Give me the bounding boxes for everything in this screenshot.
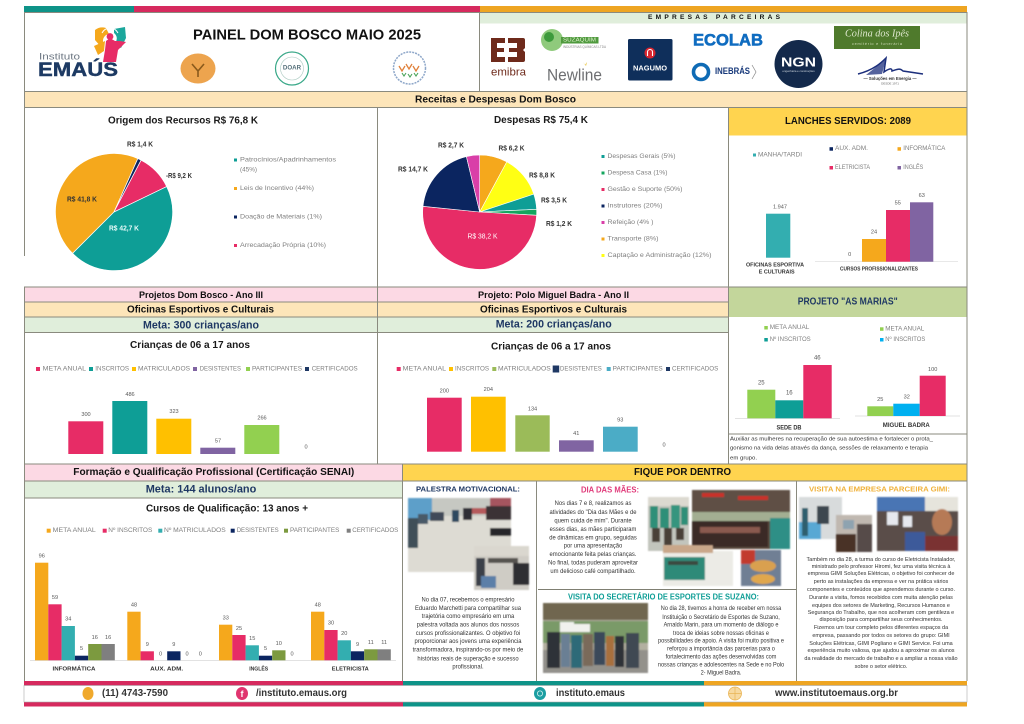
title: PAINEL DOM BOSCO MAIO 2025 — [193, 26, 421, 44]
text: as marias description: gonismo na vida delas através da dança, sessões de relaxamento e terapia — [730, 446, 929, 452]
bar chart: 200 — [440, 388, 449, 394]
header: institute logo and title — [38, 26, 426, 85]
legend: despesas: Captação e Administração (12%) — [608, 252, 712, 259]
photo: palestra audience — [474, 546, 529, 590]
contact: facebook: /instituto.emaus.org — [256, 688, 347, 699]
legend: despesas — [602, 153, 712, 259]
pie labels: R$ 42,7 K — [109, 226, 139, 232]
text: por uma apresentação — [564, 542, 623, 550]
bar chart: Miguel Badra: MIGUEL BADRA — [883, 422, 930, 429]
photo: grupo com certificados — [877, 497, 958, 551]
legend: despesas: Gestão e Suporte (50%) — [608, 186, 682, 193]
text: transformadora, inspirando-os por meio de — [413, 646, 524, 654]
legend: CERTIFICADOS — [312, 366, 358, 372]
bar chart: oficinas: OFICINAS ESPORTIVA — [746, 262, 804, 268]
text: proporcionar aos jovens uma experiência — [414, 638, 522, 645]
photo: palestra room — [408, 498, 511, 572]
logo: Gimi: — Soluções em Energia — — [863, 76, 917, 81]
group: inglês: 15 — [249, 636, 255, 642]
legend — [36, 366, 358, 372]
contact: phone — [82, 687, 168, 700]
pie labels: R$ 41,8 K — [67, 196, 97, 204]
pie labels: R$ 1,2 K — [546, 221, 572, 228]
logo: Ecolab: ECOLAB — [693, 30, 763, 50]
legend: Miguel Badra: META ANUAL — [885, 326, 925, 332]
logo: Newline: Newline — [547, 66, 602, 84]
text: experiência muito valiosa, que ajudou a aproximar os alunos — [807, 648, 955, 654]
contact: instagram: instituto.emaus — [556, 688, 625, 699]
group: eletricista: ELETRICISTA — [332, 666, 369, 672]
heading: DIA DAS MÃES: — [581, 486, 639, 494]
contact: facebook — [236, 687, 347, 700]
legend: lanches: AUX. ADM. — [835, 145, 868, 152]
group: inglês: 33 — [223, 616, 229, 622]
band: oficinas — [377, 302, 728, 317]
legend: PARTICIPANTES — [613, 366, 663, 372]
logo: Gimi — [858, 58, 923, 86]
text: as marias description: Auxiliar as mulheres na recuperação de sua autoestima e fortalecer o prota_ — [730, 436, 934, 442]
bar chart: 486 — [125, 392, 135, 398]
top colour bar — [24, 6, 967, 12]
legend: despesas: Despesa Casa (1%) — [608, 170, 668, 176]
logo: NGN — [774, 40, 822, 88]
band: oficinas: Oficinas Esportivos e Culturais — [127, 304, 274, 316]
chart title: Despesas R$ 75,4 K — [494, 114, 588, 126]
band: Receitas e Despesas — [24, 92, 967, 108]
chart title: Crianças de 06 a 17 anos — [491, 341, 611, 353]
bar chart: oficinas — [746, 204, 804, 276]
text: componentes e conteúdos que aprendemos durante o curso. — [807, 587, 955, 593]
group: eletricista: 11 — [368, 640, 374, 646]
group: inglês: 25 — [236, 626, 242, 632]
logo: NGN: engenharia e construções — [782, 69, 815, 73]
text: ministrado pelo professor Hiromi, fez uma visita técnica à — [812, 564, 951, 570]
text: esses dias, as mães participaram — [550, 526, 636, 533]
bar chart: 323 — [169, 409, 179, 415]
logo: Inebras: INEBRÁS — [715, 66, 750, 77]
logo: NGN: NGN — [781, 54, 816, 70]
logo: emibra: emibra — [491, 66, 527, 78]
text: emocionante feita pelas crianças. — [550, 551, 637, 558]
text: as marias description: em grupo. — [730, 455, 757, 461]
legend: Miguel Badra — [880, 326, 925, 343]
legend: PARTICIPANTES — [252, 366, 302, 372]
legend: origem: Leis de Incentivo (44%) — [240, 185, 314, 192]
logo: Suzaquim: INDÚSTRIAS QUÍMICAS LTDA — [563, 45, 607, 49]
bar chart: sede: 16 — [786, 391, 793, 397]
legend: DESISTENTES — [200, 366, 241, 372]
text — [658, 606, 784, 677]
text: disposição para compartilhar seus conhecimentos. — [819, 617, 943, 623]
news: visita do secretário — [543, 592, 784, 677]
text: da realidade do mercado de trabalho e a ampliar a nossa visão — [804, 656, 958, 662]
group: inglês: 0 — [290, 652, 294, 658]
band: meta: Meta: 200 crianças/ano — [496, 318, 612, 330]
bar chart: Miguel Badra: 25 — [877, 397, 883, 403]
group: eletricista: 11 — [381, 640, 387, 646]
text: No dia 28, tivemos a honra de receber em nossa — [661, 606, 782, 612]
legend: origem: Arrecadação Própria (10%) — [240, 242, 326, 249]
text: profissional. — [452, 663, 484, 671]
logo: Gimi: DESDE 1971 — [881, 82, 899, 86]
band: Empresas parceiras: EMPRESAS PARCEIRAS — [648, 14, 781, 21]
legend: META ANUAL — [53, 527, 96, 534]
contact: facebook: f — [240, 689, 244, 699]
legend: origem: (45%) — [240, 166, 257, 174]
text: de dinâmicas em grupo, seguidas — [549, 534, 637, 541]
text: palestra voltada aos alunos dos nossos — [417, 621, 519, 629]
group: eletricista: 48 — [315, 602, 321, 608]
divider — [538, 588, 796, 590]
pie labels: R$ 1,4 K — [127, 142, 153, 148]
text: Também no dia 28, a turma do curso de Eletricista Instalador, — [807, 557, 956, 563]
legend: META ANUAL — [43, 366, 86, 372]
text: Eduardo Marchetti para compartilhar sua — [415, 605, 522, 612]
photo: bolos — [741, 550, 781, 586]
bar chart: 93 — [617, 417, 623, 423]
group: aux. adm.: 0 — [159, 652, 162, 658]
bar chart: oficinas: E CULTURAIS — [759, 270, 795, 276]
legend: MATRICULADOS — [498, 366, 551, 372]
text — [548, 500, 638, 575]
legend: sede: Nº INSCRITOS — [770, 336, 811, 343]
text: No final, todas puderam aproveitar — [548, 559, 638, 566]
group: informática: 34 — [65, 616, 71, 622]
pie labels — [398, 142, 572, 240]
text: empresa, passando por todos os setores do grupo: GIMI — [812, 633, 950, 639]
photo: visita 1 — [799, 497, 842, 539]
footer — [24, 681, 967, 706]
bar chart: cursos profissionalizantes: 55 — [895, 201, 901, 207]
text: Durante a visita, fomos recebidos com muita atenção pelas — [809, 595, 953, 601]
bar chart: sede: SEDE DB — [776, 424, 802, 432]
group: eletricista: 20 — [341, 631, 347, 637]
band: meta: Meta: 300 crianças/ano — [143, 320, 259, 332]
legend: despesas: Despesas Gerais (5%) — [608, 153, 676, 160]
band: fique por dentro: FIQUE POR DENTRO — [634, 466, 731, 478]
group: inglês — [219, 616, 294, 672]
band: formação heading — [24, 464, 402, 481]
pie labels: R$ 38,2 K — [468, 234, 498, 240]
legend: INSCRITOS — [95, 366, 129, 372]
panel: despesas — [398, 114, 712, 269]
text: Soluções Elétricas, GIMI Pogliano e GIMI Service. Foi uma — [809, 641, 953, 647]
text: sobre o setor elétrico. — [855, 664, 908, 670]
group: inglês: 5 — [264, 646, 267, 652]
bar chart: oficinas: 1.947 — [773, 204, 787, 210]
bar chart: cursos profissionalizantes — [815, 193, 958, 272]
bar chart: 204 — [484, 387, 493, 393]
pie labels: R$ 6,2 K — [498, 146, 524, 152]
bar chart: sede: 25 — [758, 380, 765, 386]
text: 2- Miguel Badra. — [701, 671, 742, 677]
group: informática: INFORMÁTICA — [52, 665, 96, 672]
legend: CERTIFICADOS — [672, 366, 718, 372]
pie chart: origem — [55, 154, 173, 271]
legend: Nº INSCRITOS — [108, 527, 152, 534]
text: nossas crianças e adolescentes na Sede e no Polo — [658, 663, 784, 669]
logo: Nagumo: NAGUMO — [633, 66, 668, 72]
band: meta — [377, 317, 728, 332]
bar chart: 300 — [81, 412, 91, 418]
news: visita empresa GIMI — [799, 484, 958, 670]
group: informática: 16 — [92, 635, 98, 641]
panel: formação e qualificação — [24, 464, 402, 672]
band: fique por dentro — [402, 464, 967, 481]
legend: Nº MATRICULADOS — [164, 527, 226, 534]
legend: despesas: Instrutores (20%) — [608, 202, 662, 210]
legend: sede: META ANUAL — [770, 324, 810, 331]
text: troca de ideias sobre nossas oficinas e — [673, 631, 769, 637]
bar chart: sede: 46 — [814, 355, 821, 361]
text: atividades do "Dia das Mães e de — [549, 509, 637, 516]
band: lanches heading: LANCHES SERVIDOS: 2089 — [785, 115, 911, 127]
legend: lanches — [753, 143, 946, 171]
group: aux. adm.: 9 — [146, 642, 149, 648]
text: perto as instalações da empresa e ver na prática vários — [814, 579, 948, 585]
group: eletricista: 9 — [356, 642, 359, 648]
legend: despesas: Refeição (4% ) — [608, 219, 654, 226]
legend: origem: Patrocínios/Apadrinhamentos — [240, 156, 336, 164]
chart title: Crianças de 06 a 17 anos — [130, 339, 250, 351]
chart title: Cursos de Qualificação: 13 anos + — [146, 502, 308, 514]
logo: Colina dos Ipês — [834, 26, 920, 49]
group: aux. adm.: 9 — [172, 642, 175, 648]
photo: grupo com secretário — [543, 603, 648, 673]
pie labels: -R$ 9,2 K — [166, 173, 192, 180]
band: formação heading: Formação e Qualificação Profissional (Certificação SENAI) — [73, 466, 354, 478]
band: projeto title: Projetos Dom Bosco - Ano III — [139, 290, 263, 300]
band: as marias heading — [728, 287, 967, 317]
bar chart: 134 — [528, 406, 537, 412]
panel: projeto As Marias — [728, 287, 967, 461]
logo wordmark — [38, 52, 118, 81]
legend: lanches: MANHA/TARDI — [758, 152, 802, 158]
logo: Suzaquim — [541, 29, 607, 51]
bar chart: 41 — [573, 431, 579, 437]
logo wordmark: Instituto — [39, 52, 80, 62]
group: informática — [35, 554, 115, 672]
panel: projeto Miguel Badra — [377, 287, 728, 452]
text: quem cuida de mim". Durante — [554, 517, 632, 525]
band: meta — [24, 481, 402, 498]
group: eletricista: 30 — [328, 621, 334, 627]
heading: PALESTRA MOTIVACIONAL: — [416, 484, 520, 494]
bar chart: cursos — [30, 554, 396, 672]
text: Fizemos um tour completo pelos diferentes espaços da — [814, 625, 949, 631]
band: lanches heading — [728, 108, 967, 136]
pie labels: R$ 2,7 K — [438, 142, 464, 150]
contact: website — [728, 687, 898, 700]
bar chart: cursos profissionalizantes: 24 — [871, 230, 877, 236]
bar chart: Miguel Badra: 100 — [928, 367, 937, 373]
pie labels — [67, 142, 192, 232]
legend — [47, 527, 398, 534]
text: reforçou a importância das parcerias para o — [667, 646, 775, 652]
text: possibilidades de apoio. A visita foi muito positiva e — [658, 639, 784, 645]
band: as marias heading: PROJETO "AS MARIAS" — [798, 296, 898, 308]
partner logos — [491, 26, 923, 88]
bar chart: Miguel Badra — [855, 367, 960, 429]
bar chart: sede — [735, 355, 840, 432]
bar chart: 57 — [215, 439, 221, 445]
seal: orange — [180, 54, 216, 84]
bar chart: cursos profissionalizantes: CURSOS PROFISSIONALIZANTES — [840, 266, 918, 272]
seal: colourful circle — [394, 52, 426, 84]
legend: lanches: INGLÊS — [903, 162, 923, 171]
text: empresa GIMI Soluções Elétricas, o objetivo foi conhecer de — [808, 571, 954, 577]
contact: phone: (11) 4743-7590 — [102, 688, 168, 699]
photo: refeitório — [692, 490, 790, 549]
legend: origem: Doação de Materiais (1%) — [240, 214, 322, 220]
group: informática: 16 — [105, 635, 111, 641]
photo: grupo de crianças — [663, 545, 733, 586]
seal: DOAR — [276, 52, 308, 85]
chart title: Origem dos Recursos R$ 76,8 K — [108, 114, 258, 126]
legend: origem — [234, 156, 336, 249]
pie labels: R$ 3,5 K — [541, 198, 567, 204]
text — [804, 557, 958, 670]
photo: crianças em pé — [648, 497, 689, 551]
group: informática: 59 — [52, 595, 58, 601]
contact: website: www.institutoemaus.org.br — [774, 688, 898, 699]
text: equipes dos setores de Marketing, Recursos Humanos e — [812, 603, 950, 609]
band: Empresas parceiras — [480, 13, 967, 24]
logo: emibra — [491, 38, 527, 78]
band: oficinas: Oficinas Esportivos e Culturais — [480, 304, 627, 316]
band: projeto title — [377, 287, 728, 302]
text: Segurança do Trabalho, que nos acolheram com gentileza e — [808, 610, 954, 616]
bar chart: 266 — [257, 416, 267, 422]
legend: DESISTENTES — [560, 366, 602, 372]
panel: origem dos recursos — [55, 114, 336, 271]
group: informática: 96 — [39, 554, 45, 560]
text: Nos dias 7 e 8, realizamos as — [555, 500, 631, 507]
logo: Colina dos Ipês: cemitério e funerária — [852, 42, 903, 46]
bar chart: Miguel Badra: 32 — [904, 394, 910, 400]
logo: Inebras — [694, 64, 756, 80]
bar chart: cursos profissionalizantes: 0 — [848, 252, 851, 258]
panel: projetos Dom Bosco — [24, 287, 377, 454]
panel: lanches servidos — [728, 108, 967, 276]
logo: Suzaquim: SUZAQUIM — [563, 37, 596, 43]
contact: instagram — [534, 687, 625, 700]
text: Instituição o Secretário de Esportes de Suzano, — [662, 615, 780, 621]
legend: despesas: Transporte (8%) — [608, 236, 658, 242]
group: inglês: INGLÊS — [249, 664, 269, 672]
bar chart: cursos profissionalizantes: 63 — [919, 193, 925, 199]
group: inglês: 10 — [276, 641, 282, 647]
band: Receitas e Despesas: Receitas e Despesas Dom Bosco — [415, 94, 576, 106]
bar chart: 0 — [662, 442, 666, 448]
group: aux. adm.: 0 — [199, 652, 202, 658]
footer bars — [24, 681, 967, 706]
heading: VISITA NA EMPRESA PARCEIRA GIMI: — [809, 484, 950, 494]
legend: INSCRITOS — [455, 366, 489, 372]
legend: PARTICIPANTES — [290, 527, 339, 534]
group: informática: 5 — [80, 646, 83, 652]
band: meta — [24, 317, 377, 332]
text: No dia 07, recebemos o empresário — [421, 596, 515, 604]
text — [413, 596, 524, 671]
bar chart: 0 — [304, 444, 308, 450]
logo: Colina dos Ipês: Colina dos Ipês — [845, 28, 909, 40]
group: aux. adm.: AUX. ADM. — [150, 666, 184, 672]
legend: CERTIFICADOS — [352, 527, 398, 534]
legend: Miguel Badra: Nº INSCRITOS — [885, 336, 925, 343]
legend: lanches: INFORMÁTICA — [903, 143, 946, 152]
pie labels: R$ 8,8 K — [529, 172, 555, 180]
legend: DESISTENTES — [237, 527, 279, 534]
news: dia das mães — [538, 486, 796, 590]
legend: lanches: ELETRICISTA — [835, 164, 871, 171]
pie chart: despesas — [423, 155, 537, 269]
text: um delicioso café compartilhado. — [550, 568, 636, 575]
seal: DOAR: DOAR — [283, 64, 302, 72]
logo wordmark: EMAÚS — [38, 59, 118, 81]
pie labels: R$ 14,7 K — [398, 166, 428, 174]
band: projeto title — [24, 287, 377, 302]
photo: visita 2 — [836, 515, 872, 552]
text: trajetória como empresário em uma — [422, 613, 515, 620]
group: aux. adm. — [127, 602, 202, 672]
news: palestra motivacional — [408, 484, 529, 671]
bar chart — [68, 392, 308, 454]
group: aux. adm.: 0 — [185, 652, 189, 658]
icon: Instituto Emaús logo figure — [94, 27, 126, 62]
group: aux. adm.: 48 — [131, 602, 137, 608]
group: eletricista — [311, 602, 391, 672]
legend: META ANUAL — [403, 366, 446, 372]
text: cursos profissionalizantes. O objetivo foi — [416, 630, 520, 637]
legend: sede — [764, 324, 811, 343]
band: meta: Meta: 144 alunos/ano — [146, 484, 257, 496]
text: fortalecimento das ações desenvolvidas com — [666, 655, 777, 661]
bar chart — [427, 387, 666, 452]
text: Arnaldo Marin, para um momento de diálogo e — [664, 623, 778, 629]
legend: MATRICULADOS — [138, 366, 190, 372]
band: projeto title: Projeto: Polo Miguel Badra - Ano II — [478, 290, 629, 300]
text: histórias reais de superação e sucesso — [417, 655, 519, 662]
heading: VISITA DO SECRETÁRIO DE ESPORTES DE SUZANO: — [568, 592, 759, 602]
text: as marias description — [730, 436, 934, 461]
band: oficinas — [24, 302, 377, 317]
legend — [397, 366, 718, 372]
logo: Nagumo — [628, 39, 672, 80]
